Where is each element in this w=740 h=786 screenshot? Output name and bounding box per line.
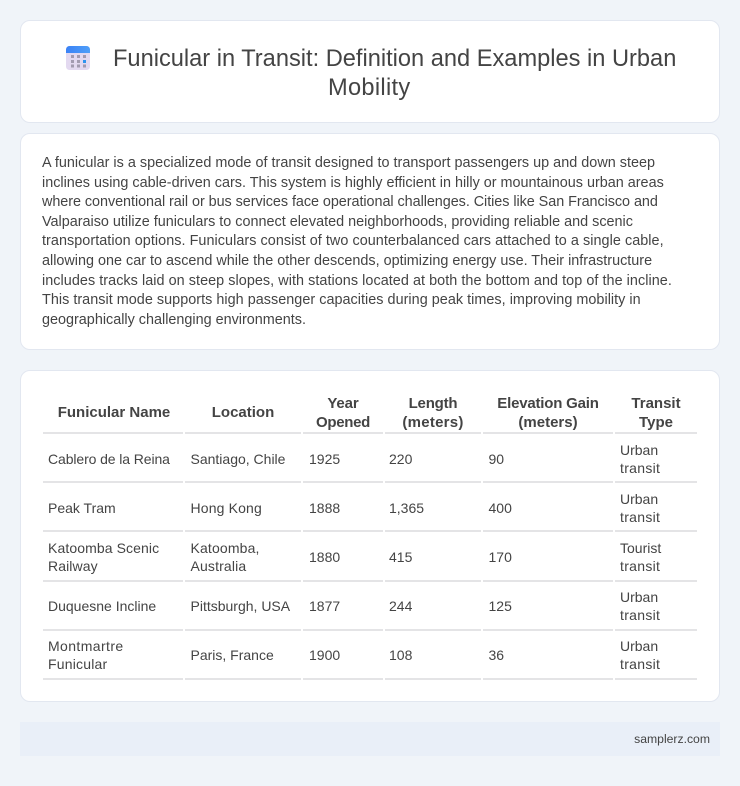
row: Duquesne Incline (48, 589, 660, 623)
row: Peak Tram: Hong Kong (190, 500, 262, 516)
description text: geographically challenging environments. (42, 312, 306, 328)
table header: Length (409, 395, 457, 412)
row: Duquesne Incline: 1877 (309, 598, 340, 614)
title: Funicular in Transit: Definition and Examples in Urban (113, 46, 676, 72)
row: Peak Tram: Urban (620, 491, 658, 507)
row: Katoomba Scenic Railway: Katoomba Scenic (48, 540, 159, 556)
row: Montmartre Funicular: Urban (620, 638, 658, 654)
table header: Funicular Name (58, 404, 170, 421)
row: Duquesne Incline: Duquesne Incline (48, 598, 156, 614)
row: Cablero de la Reina: 90 (488, 451, 504, 467)
row: Cablero de la Reina: 1925 (309, 451, 340, 467)
row: Katoomba Scenic Railway: Railway (48, 558, 98, 574)
row: Duquesne Incline: Urban (620, 589, 658, 605)
description text: Valparaiso utilize funiculars to connect elevated neighborhoods, providing reliable and scenic (42, 214, 633, 230)
row: Peak Tram: 1,365 (389, 500, 424, 516)
description text: includes tracks laid on steep slopes, with stations located at both the bottom and top of the incline. (42, 273, 672, 289)
row: Cablero de la Reina: transit (620, 460, 660, 476)
row: Katoomba Scenic Railway (48, 540, 662, 574)
row: Montmartre Funicular: Montmartre (48, 638, 124, 654)
description text: This transit mode supports high passenger capacities during peak times, improving mobility in (42, 292, 641, 308)
row: Peak Tram: 1888 (309, 500, 340, 516)
row: Katoomba Scenic Railway: 170 (488, 549, 512, 565)
row: Cablero de la Reina: Santiago, Chile (190, 451, 285, 467)
row: Katoomba Scenic Railway: Katoomba, (190, 540, 260, 556)
table header: Opened (316, 414, 370, 431)
row: Peak Tram: Peak Tram (48, 500, 116, 516)
row: Katoomba Scenic Railway: 1880 (309, 549, 340, 565)
row: Peak Tram: transit (620, 509, 660, 525)
row: Montmartre Funicular: Paris, France (190, 647, 274, 663)
description text (42, 155, 672, 328)
row: Katoomba Scenic Railway: Australia (190, 558, 246, 574)
row: Montmartre Funicular: 1900 (309, 647, 340, 663)
table header: Year (327, 395, 359, 412)
row: Montmartre Funicular: 36 (488, 647, 504, 663)
icon: calendar (66, 46, 90, 70)
row: Cablero de la Reina (48, 442, 660, 476)
footer source text: samplerz.com (634, 732, 710, 746)
description text: where conventional rail or bus services face operational challenges. Cities like San Francisco and (42, 194, 658, 210)
footer bar (20, 722, 720, 756)
table header: (meters) (402, 414, 464, 431)
table header (58, 395, 681, 431)
table header: Type (639, 414, 673, 431)
description text: A funicular is a specialized mode of transit designed to transport passengers up and down steep (42, 155, 655, 171)
description text: inclines using cable-driven cars. This system is highly efficient in hilly or mountainous urban areas (42, 175, 664, 191)
description text: allowing one car to ascend while the other descends, optimizing energy use. Their infrastructure (42, 253, 652, 269)
header panel (20, 20, 720, 123)
panel: funicular table (20, 370, 720, 702)
row: Duquesne Incline: transit (620, 607, 660, 623)
row: Montmartre Funicular (48, 638, 660, 672)
table header: Elevation Gain (497, 395, 599, 412)
row: Montmartre Funicular: Funicular (48, 656, 107, 672)
row: Peak Tram: 400 (488, 500, 512, 516)
row: Katoomba Scenic Railway: Tourist (620, 540, 661, 556)
table header: Location (212, 404, 274, 421)
table header: Transit (631, 395, 681, 412)
row: Cablero de la Reina: Urban (620, 442, 658, 458)
row: Duquesne Incline: 244 (389, 598, 412, 614)
row: Montmartre Funicular: transit (620, 656, 660, 672)
row: Cablero de la Reina: 220 (389, 451, 412, 467)
row: Katoomba Scenic Railway: transit (620, 558, 660, 574)
panel: description (20, 133, 720, 350)
row: Duquesne Incline: Pittsburgh, USA (190, 598, 290, 614)
row: Duquesne Incline: 125 (488, 598, 512, 614)
table header: (meters) (518, 414, 578, 431)
description text: transportation options. Funiculars consist of two counterbalanced cars attached to a single cable, (42, 233, 664, 249)
row: Katoomba Scenic Railway: 415 (389, 549, 412, 565)
title (113, 46, 676, 101)
row: Montmartre Funicular: 108 (389, 647, 412, 663)
row: Cablero de la Reina: Cablero de la Reina (48, 451, 170, 467)
row: Peak Tram (48, 491, 660, 525)
title: Mobility (328, 75, 410, 101)
